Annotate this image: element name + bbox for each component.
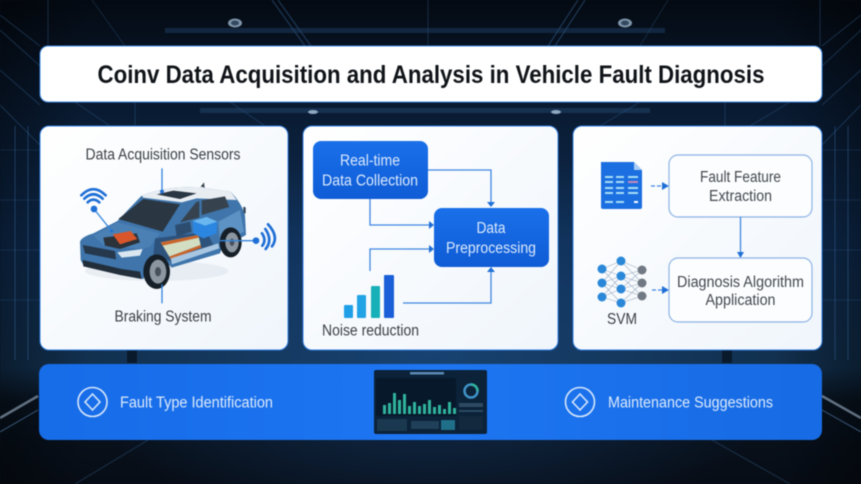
box: real-time data collection: [313, 141, 428, 199]
icon: neural network: [598, 256, 646, 308]
icon: data sheet: [601, 162, 642, 209]
box: real-time data collection: Data Collection: [322, 172, 418, 190]
sensor connector lines: [94, 168, 256, 303]
label: svm: SVM: [607, 311, 637, 328]
box: diagnosis algorithm application: Diagnosis Algorithm: [677, 274, 804, 291]
label: maintenance suggestions: Maintenance Suggestions: [608, 394, 773, 412]
icon: fault type diamond: [78, 388, 107, 416]
bottom results band: [39, 364, 822, 440]
panel: feature extraction and diagnosis: [573, 126, 822, 350]
arrow: sheet to feature extraction: [651, 182, 669, 190]
box: diagnosis algorithm application: [669, 258, 812, 322]
title bar: [40, 46, 822, 102]
icon: wifi right: [253, 224, 275, 249]
dashboard thumbnail: [374, 370, 487, 434]
panel: vehicle sensors: [40, 126, 288, 350]
box: fault feature extraction: [669, 155, 812, 217]
icon: wifi left: [81, 189, 106, 212]
label: braking system: Braking System: [114, 308, 212, 326]
box: data preprocessing: Data: [476, 220, 506, 237]
label: fault type identification: Fault Type Identification: [120, 394, 273, 412]
flow arrows: [370, 170, 495, 303]
box: data preprocessing: Preprocessing: [446, 240, 536, 257]
box: real-time data collection: Real-time: [340, 152, 400, 170]
panel: data collection and preprocessing: [303, 126, 558, 350]
car illustration: [80, 182, 246, 289]
box: fault feature extraction: Fault Feature: [700, 169, 781, 186]
label: noise reduction: Noise reduction: [322, 322, 419, 340]
arrow: svm to diagnosis: [652, 286, 669, 294]
icon: signal bars: [344, 275, 394, 318]
box: diagnosis algorithm application: Application: [706, 292, 776, 309]
title text: Coinv Data Acquisition and Analysis in Vehicle Fault Diagnosis: [98, 61, 764, 89]
arrow: extraction to diagnosis: [737, 217, 744, 258]
box: fault feature extraction: Extraction: [709, 188, 772, 205]
box: data preprocessing: [434, 208, 549, 267]
icon: maintenance diamond: [566, 388, 594, 416]
label: data acquisition sensors: Data Acquisition Sensors: [86, 146, 241, 164]
